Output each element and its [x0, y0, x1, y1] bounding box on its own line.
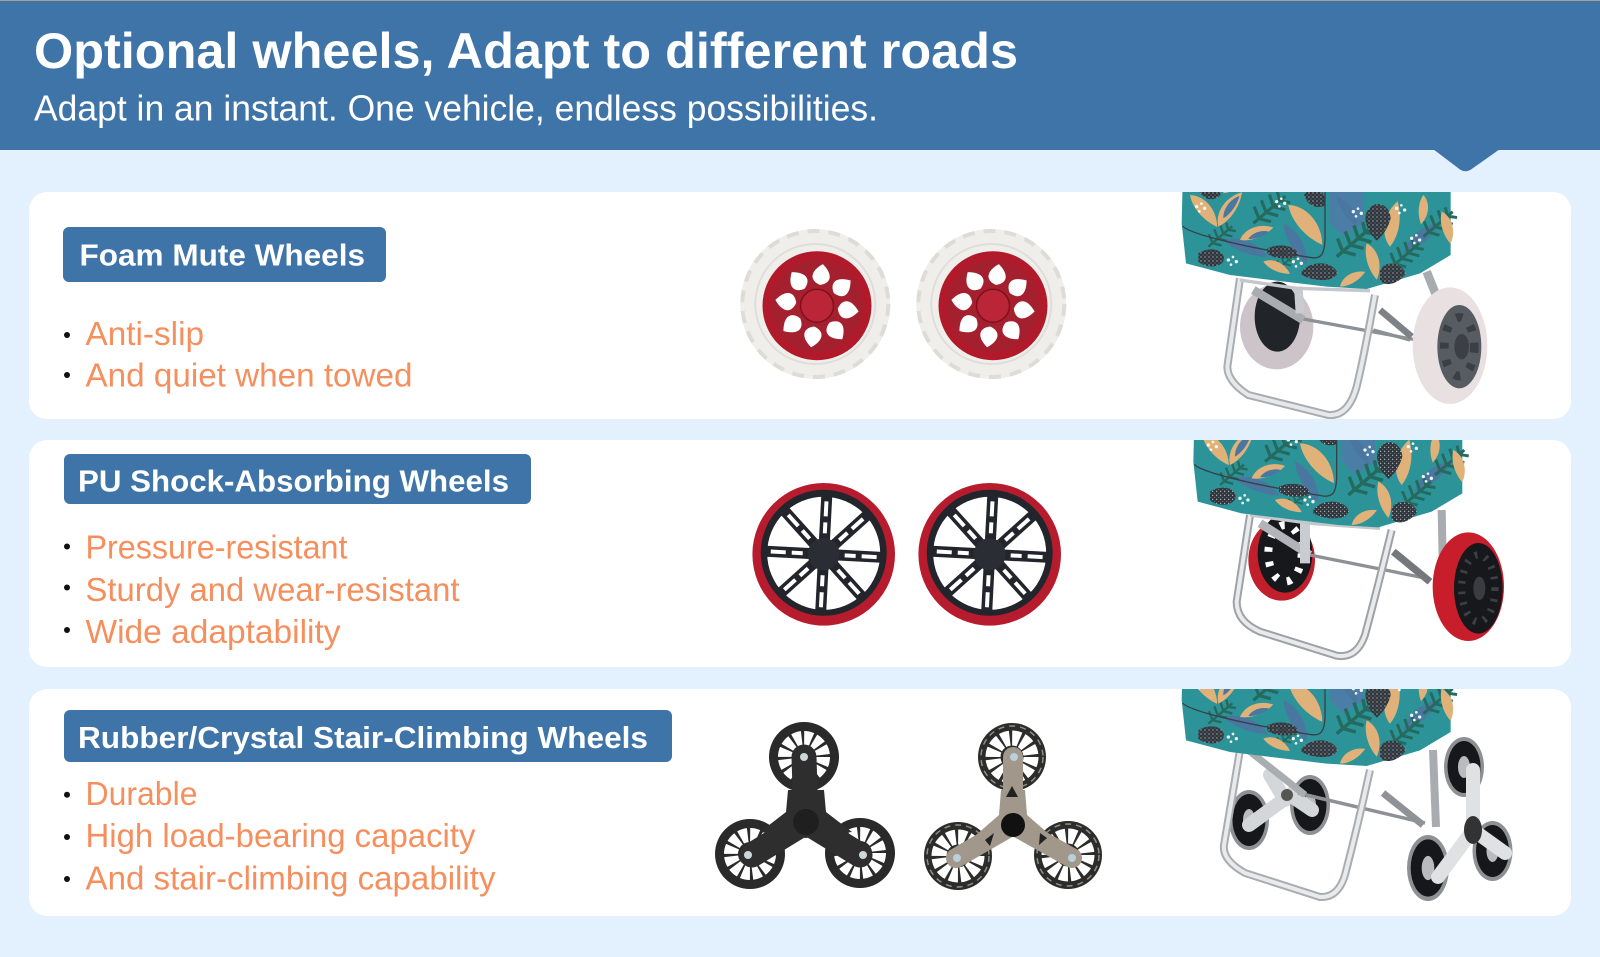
- heading pill: stair-climbing wheels: Rubber/Crystal Stair-Climbing Wheels: [78, 720, 648, 755]
- feature list: stair-climbing: And stair-climbing capability: [86, 860, 496, 896]
- feature list: PU: [64, 528, 460, 650]
- icon: black stair-climbing wheel: [715, 722, 895, 889]
- heading pill: PU wheels: PU Shock-Absorbing Wheels: [78, 464, 509, 498]
- icon: foam wheels pair: [740, 229, 1066, 379]
- panel: PU shock-absorbing wheels: [29, 440, 1571, 667]
- panel: foam mute wheels: [29, 192, 1571, 419]
- feature list: PU: Wide adaptability: [86, 613, 341, 650]
- feature list: foam: Anti-slip: [86, 315, 204, 352]
- feature list: PU: Pressure-resistant: [86, 528, 348, 566]
- feature list: PU: Sturdy and wear-resistant: [86, 571, 460, 608]
- header pointer notch: [1433, 149, 1500, 171]
- feature list: foam: And quiet when towed: [86, 356, 412, 394]
- icon: PU wheels pair: [752, 483, 1061, 626]
- feature list: stair-climbing: High load-bearing capacity: [86, 817, 476, 854]
- feature list: stair-climbing: [64, 775, 496, 896]
- title: Optional wheels, Adapt to different roads: [34, 23, 1018, 79]
- feature list: foam: [64, 315, 412, 394]
- header banner: [0, 0, 1600, 171]
- heading pill: stair-climbing wheels: [64, 710, 672, 762]
- panel: rubber/crystal stair-climbing wheels: [29, 689, 1571, 916]
- subtitle: Adapt in an instant. One vehicle, endless possibilities.: [34, 88, 878, 128]
- icon: tan stair-climbing wheel: [924, 723, 1102, 890]
- cart with stair-climbing wheels: [1182, 689, 1512, 901]
- feature list: stair-climbing: Durable: [86, 775, 198, 812]
- cart with foam wheels: [1182, 192, 1488, 419]
- heading pill: foam mute wheels: Foam Mute Wheels: [80, 238, 365, 272]
- heading pill: foam mute wheels: [63, 227, 386, 282]
- cart with PU wheels: [1193, 440, 1504, 660]
- heading pill: PU wheels: [64, 454, 531, 504]
